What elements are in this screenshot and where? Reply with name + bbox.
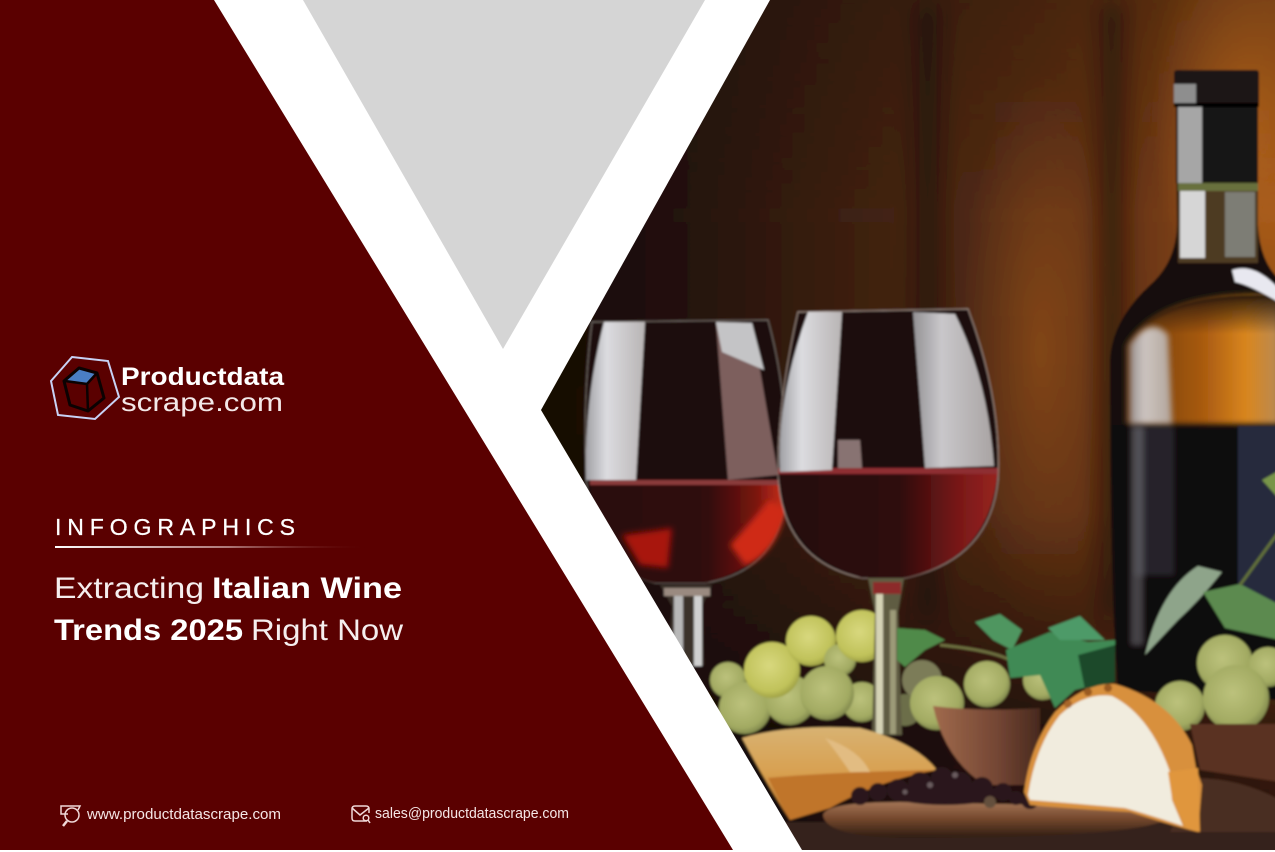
bottle capsule: [1174, 70, 1259, 183]
website contact: [61, 806, 281, 826]
email address: sales@productdatascrape.com: [375, 806, 569, 822]
panel: grey triangle: [303, 0, 705, 349]
wooden bowl: [933, 706, 1275, 785]
icon: mail search: [352, 806, 370, 823]
cutting board: [823, 802, 1165, 838]
right bread slice: [1024, 684, 1202, 832]
wooden wall: [530, 0, 1275, 852]
icon: hexagon cube: [51, 357, 119, 419]
title: Trends 2025: [54, 614, 243, 647]
title: Right Now: [251, 614, 403, 647]
email contact: [352, 806, 569, 823]
title: [54, 572, 403, 647]
left wine glass: [585, 320, 787, 666]
title: Italian Wine: [212, 572, 402, 605]
grapes: [710, 610, 1275, 734]
heading: infographics: INFOGRAPHICS: [55, 514, 295, 540]
title: Extracting: [54, 572, 204, 605]
left bread: [742, 727, 937, 820]
logo: [51, 357, 285, 419]
panel: wine photo scene: [530, 0, 1275, 852]
vine leaves: [897, 470, 1275, 708]
logo wordmark bold: Productdata: [121, 363, 285, 391]
website url: www.productdatascrape.com: [86, 807, 281, 823]
panel: maroon triangle: [0, 0, 733, 850]
raisins: [851, 767, 1039, 809]
divider rule: [55, 546, 370, 548]
logo wordmark light: scrape.com: [121, 387, 283, 417]
table: [780, 778, 1275, 852]
icon: website search: [61, 806, 80, 826]
right wine glass: [778, 309, 998, 735]
wine bottle: [1110, 70, 1275, 700]
